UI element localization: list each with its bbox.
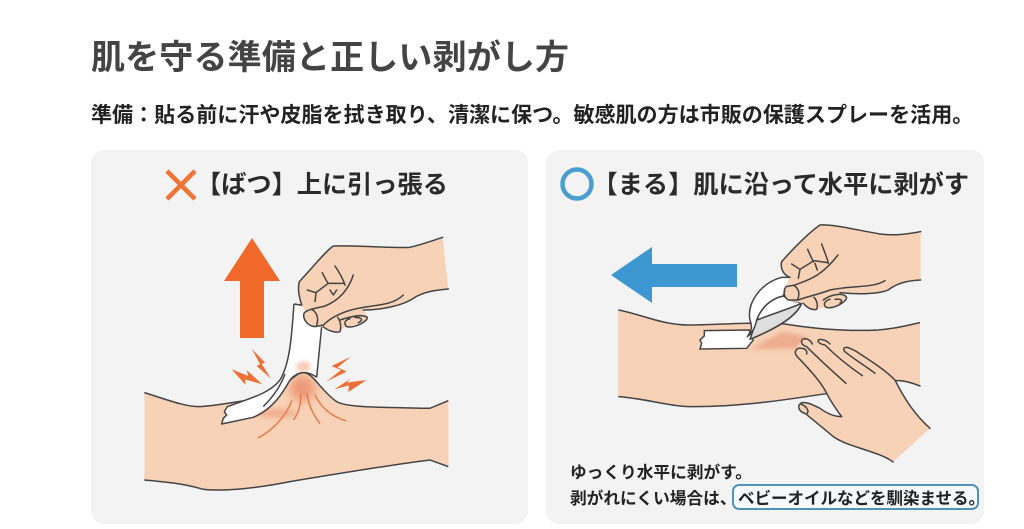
tape: right	[700, 330, 753, 349]
hand: lower right	[795, 339, 930, 462]
instruction text: 剥がれにくい場合は、	[570, 488, 737, 508]
arm: left	[144, 373, 448, 490]
arm: right	[618, 310, 920, 407]
title: 肌を守る準備と正しい剥がし方	[91, 38, 569, 77]
panel background right	[546, 150, 984, 524]
arrow: up	[224, 238, 280, 338]
arrow: left	[611, 247, 737, 303]
pain sparks and strain lines	[232, 349, 367, 438]
heading: right way: 【まる】肌に沿って水平に剥がす	[592, 170, 969, 199]
heading: wrong way: 【ばつ】上に引っ張る	[196, 171, 448, 199]
instruction text	[570, 462, 985, 509]
instruction text: ゆっくり水平に剥がす。	[570, 462, 752, 482]
icon: cross	[167, 171, 195, 199]
panel background left	[91, 150, 528, 524]
hand: left	[299, 237, 448, 332]
panel: right way	[546, 150, 985, 524]
icon: circle	[562, 170, 592, 198]
highlighted text: ベビーオイルなどを馴染ませる。	[738, 488, 985, 508]
highlight box	[733, 485, 978, 509]
panel: wrong way	[91, 150, 528, 524]
preparation text: 準備：貼る前に汗や皮脂を拭き取り、清潔に保つ。敏感肌の方は市販の保護スプレーを活用。	[91, 102, 973, 127]
hand: upper right	[781, 225, 921, 310]
tape: left	[222, 304, 323, 424]
tape curl: right	[747, 277, 802, 339]
